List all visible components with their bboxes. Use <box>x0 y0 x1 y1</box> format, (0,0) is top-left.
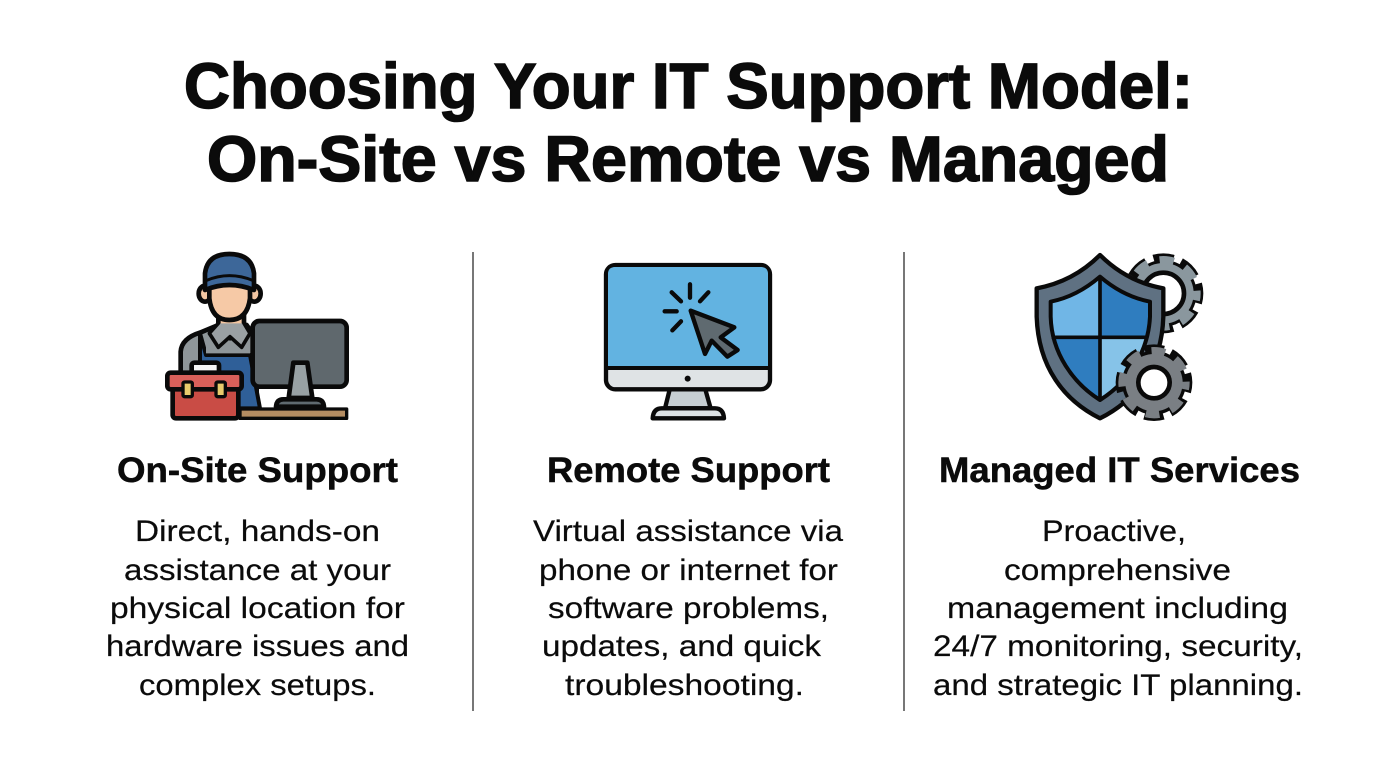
panel: remote support <box>533 265 843 702</box>
text: remote description: phone or internet for <box>539 554 838 587</box>
text: on-site description: physical location for <box>110 592 405 625</box>
text: managed description: management including <box>947 592 1288 625</box>
panel: on-site support <box>106 254 409 702</box>
icon: technician with toolbox and monitor <box>167 254 347 418</box>
infographic canvas <box>108 60 1300 711</box>
text: remote description: updates, and quick <box>542 630 822 663</box>
title: On-Site vs Remote vs Managed <box>207 123 1169 195</box>
icon: shield with gears <box>1037 255 1197 418</box>
text: managed description: comprehensive <box>1004 554 1231 587</box>
text: remote description: Virtual assistance via <box>533 515 843 548</box>
text: managed description: and strategic IT planning. <box>933 669 1303 702</box>
text: on-site description: assistance at your <box>124 554 391 587</box>
text: managed description <box>933 515 1303 702</box>
title <box>184 50 1193 195</box>
text: remote description: software problems, <box>548 592 829 625</box>
text: on-site description: complex setups. <box>139 669 376 702</box>
text: remote description <box>533 515 843 702</box>
text: on-site description: Direct, hands-on <box>135 515 380 548</box>
heading: on-site support: On-Site Support <box>117 451 398 490</box>
panel: managed IT services <box>933 255 1303 702</box>
title: Choosing Your IT Support Model: <box>184 50 1193 122</box>
text: on-site description: hardware issues and <box>106 630 409 663</box>
heading: remote support: Remote Support <box>547 451 830 490</box>
text: on-site description <box>106 515 409 702</box>
text: managed description: Proactive, <box>1042 515 1186 548</box>
text: remote description: troubleshooting. <box>565 669 804 702</box>
text: managed description: 24/7 monitoring, security, <box>933 630 1303 663</box>
icon: monitor with cursor <box>606 265 770 418</box>
heading: managed IT services: Managed IT Services <box>939 451 1300 490</box>
